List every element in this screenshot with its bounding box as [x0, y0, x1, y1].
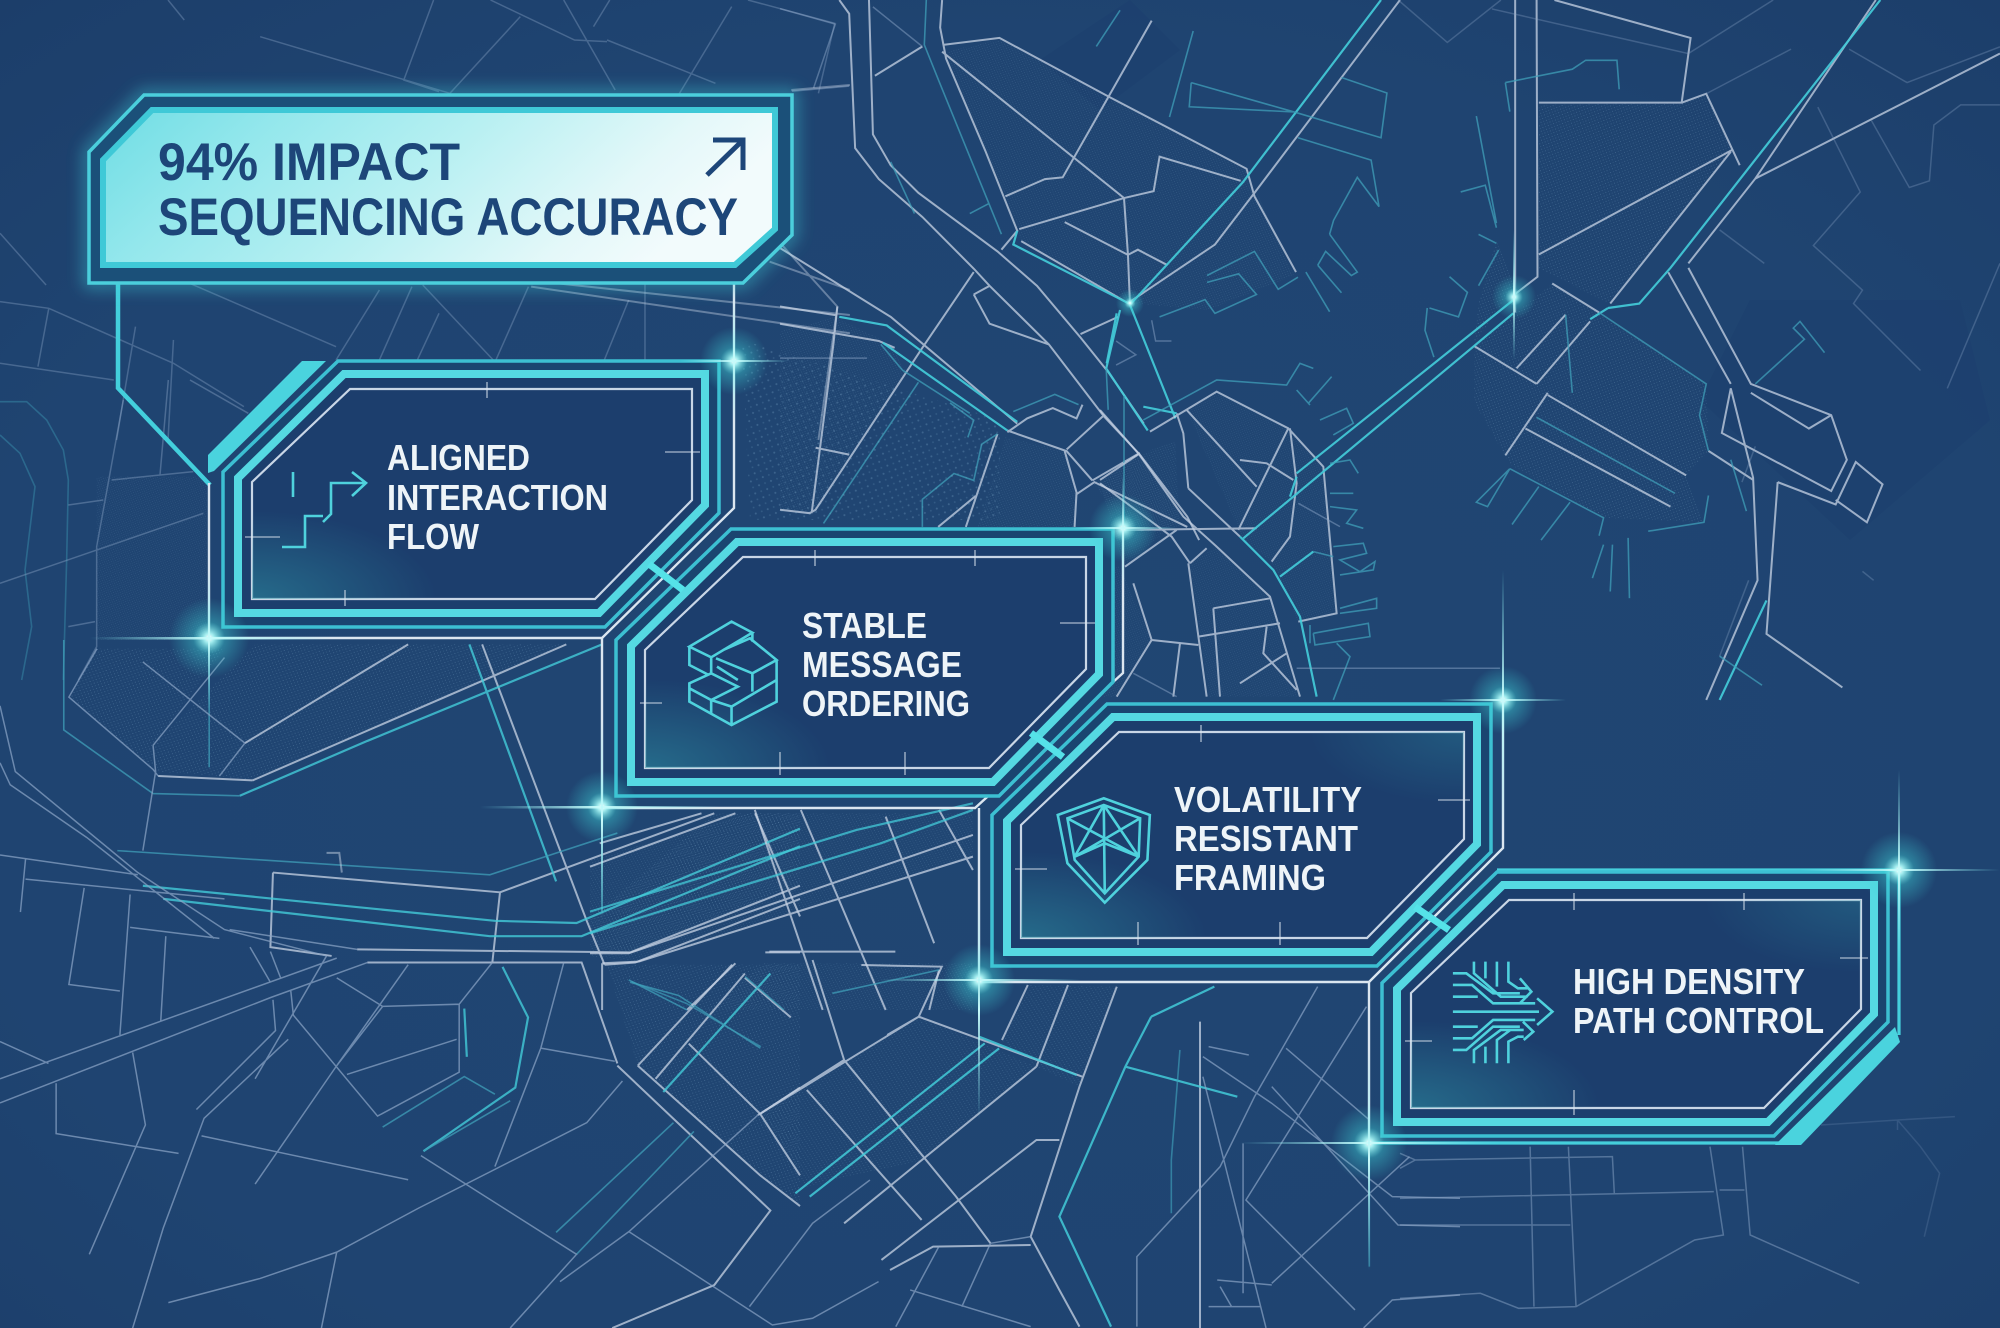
label: VOLATILITY [1174, 779, 1362, 820]
label: ORDERING [802, 683, 970, 724]
map block: between second and third panels [590, 803, 973, 1010]
accent bar [208, 361, 326, 473]
panel: High Density Path Control [1369, 870, 1900, 1145]
label: FLOW [387, 516, 479, 557]
map block: top centre [780, 0, 1400, 540]
frame [223, 361, 719, 627]
panel connector links [649, 564, 1449, 930]
label: FRAMING [1174, 857, 1326, 898]
map block: lower centre [560, 960, 1460, 1328]
panel: Volatility Resistant Framing [979, 700, 1503, 982]
icon: up-right arrow [707, 140, 743, 175]
label: INTERACTION [387, 477, 608, 518]
label: RESISTANT [1174, 818, 1358, 859]
callout frame [89, 95, 792, 283]
frame [1382, 872, 1888, 1136]
callout glow [89, 95, 792, 283]
frame [616, 529, 1113, 796]
callout text [158, 133, 738, 247]
frame [992, 704, 1491, 966]
outer guide lines [1368, 982, 1370, 1143]
outer guide lines [209, 283, 734, 638]
icon: stepped arrow [282, 472, 366, 547]
callout text: 94% IMPACT [158, 133, 460, 192]
label: HIGH DENSITY [1573, 961, 1805, 1002]
outer guide lines [979, 700, 1503, 982]
label [387, 437, 608, 557]
callout: 94% impact sequencing accuracy [89, 95, 792, 283]
panel: Aligned Interaction Flow [208, 283, 734, 638]
callout text: SEQUENCING ACCURACY [158, 188, 738, 247]
label: STABLE [802, 605, 927, 646]
label: ALIGNED [387, 437, 530, 478]
map block: top right [1398, 0, 2000, 700]
map block: left edge [0, 380, 248, 680]
label [1174, 779, 1362, 898]
connector: callout to first panel [118, 283, 210, 485]
label: PATH CONTROL [1573, 1000, 1824, 1041]
icon: shield [1058, 798, 1150, 903]
map block: above callout and left [0, 0, 850, 440]
map block: centre district [1100, 300, 1513, 700]
glow nodes [90, 230, 2000, 1270]
outer guide lines [602, 528, 1123, 808]
map block: lower right [1400, 1117, 1955, 1308]
label [1573, 961, 1824, 1041]
icon: converging paths arrow [1453, 962, 1552, 1063]
map block: right of first panel [742, 340, 1000, 520]
icon: stacked blocks [689, 622, 777, 725]
label: MESSAGE [802, 644, 962, 685]
label [802, 605, 970, 724]
accent bar [1775, 1027, 1900, 1145]
map block: lower left [0, 640, 800, 1328]
panel: Stable Message Ordering [602, 528, 1123, 808]
